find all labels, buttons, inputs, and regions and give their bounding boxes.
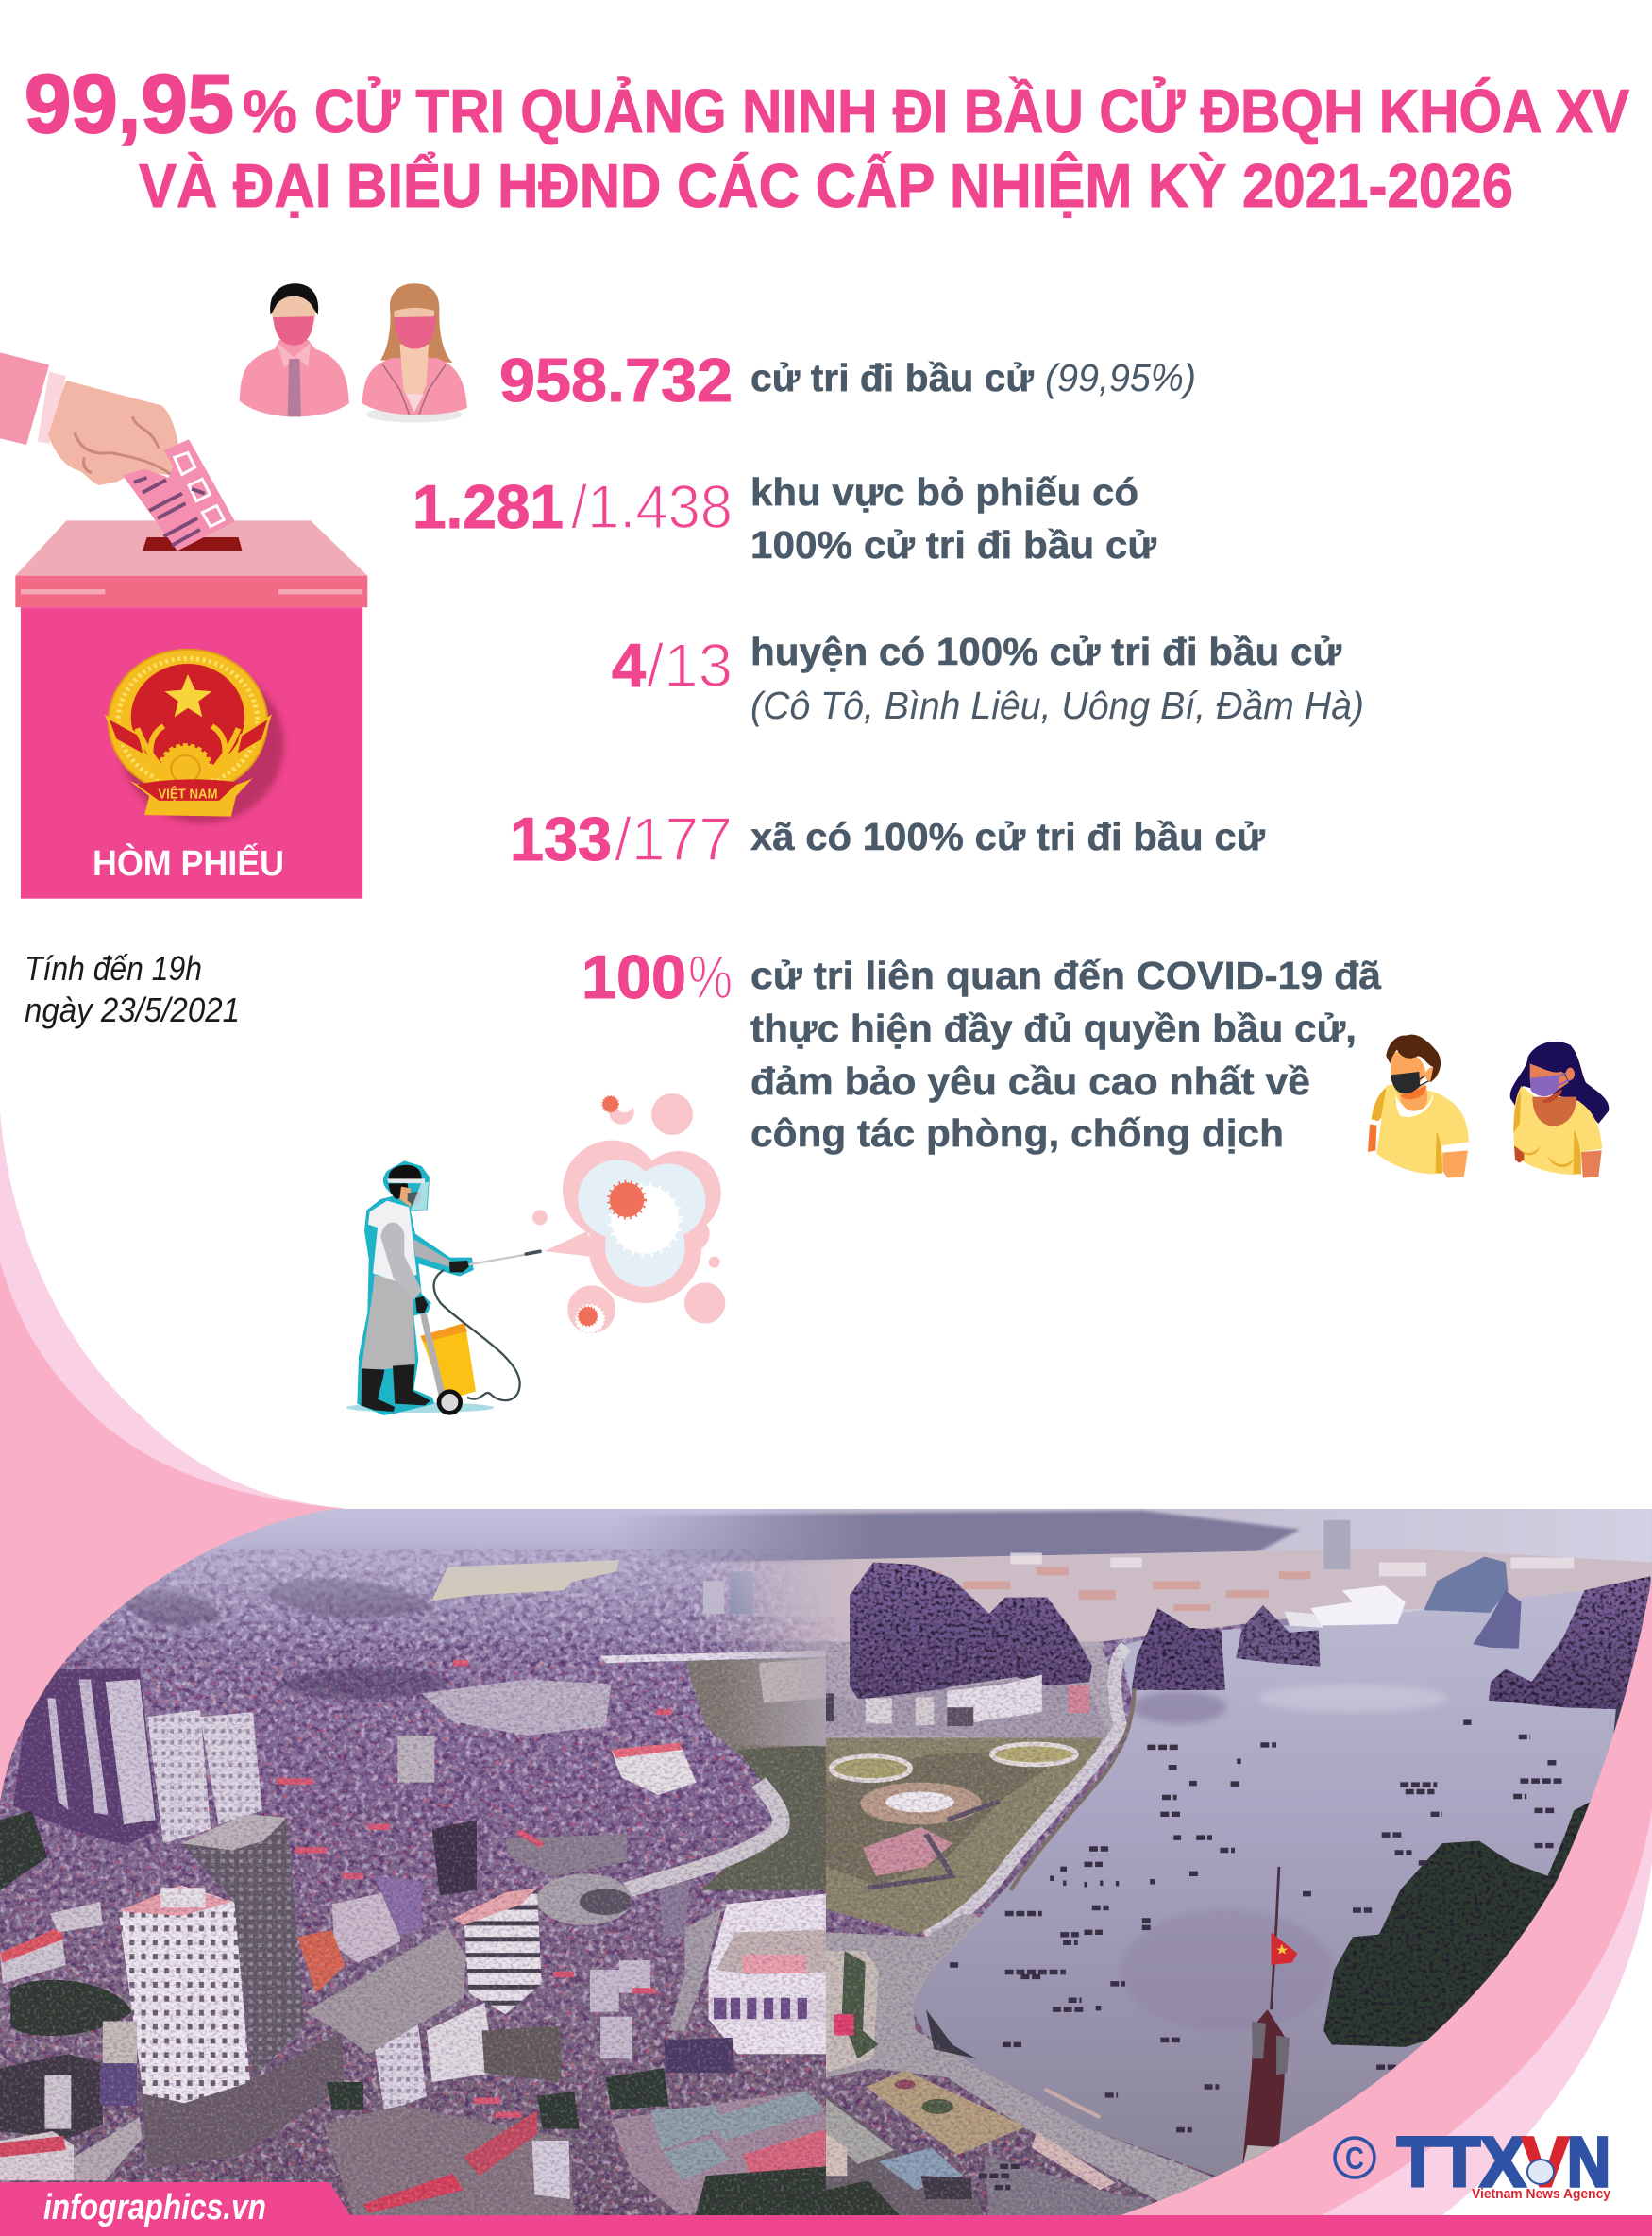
logo: TTXVN: V [1522,2123,1569,2201]
park and coastal road [826,1642,1226,2218]
logo: TTXVN [1335,2123,1611,2202]
stat row: 958.732 voters: cử tri đi bầu cử [750,356,1034,399]
photo: Ha Long city and bay [0,1509,1652,2236]
note: as of date: ngày 23/5/2021 [25,991,240,1029]
sleeve and cuff [0,352,66,445]
man [240,283,349,416]
stat row: 1.281/1.438 polling areas: 1.281 [413,472,564,541]
logo: TTXVN: N [1567,2123,1610,2201]
box lid top [15,520,367,576]
stat row: 133/177 communes: /177 [615,805,733,873]
note: as of date: Tính đến 19h [25,949,202,988]
stat row: 133/177 communes: xã có 100% cử tri đi bầu cử [750,815,1265,858]
stat row: 958.732 voters: (99,95%) [1045,356,1196,399]
icon: disinfection worker spraying virus [346,1093,725,1415]
fine detail overlay [0,1642,826,2215]
logo: TTXVN: TTX [1397,2123,1526,2201]
icon: man and woman wearing masks [1368,1035,1609,1177]
title: 99,95 [25,57,234,150]
box body [21,607,362,899]
hand [48,381,179,485]
left decorative swoosh [0,1111,343,2215]
yellow tank on wheel [420,1270,520,1413]
right decorative swoosh [1121,1576,1652,2215]
woman with purple mask [1510,1042,1609,1177]
stat row: 100% COVID-19 related voters: công tác phòng, chống dịch [750,1111,1284,1155]
big dark island bottom right [1323,1796,1600,2047]
icon: ballot box with hand [0,352,367,899]
national emblem: VIỆT NAM [158,786,218,802]
town below karst [826,1675,1108,1740]
icon: man and woman voters in masks [240,283,467,423]
note: as of date [25,949,240,1029]
stat row: 4/13 districts: 4 [612,631,646,700]
stat row: 4/13 districts: (Cô Tô, Bình Liêu, Uông Bí, Đầm Hà) [750,684,1364,727]
stat row: 4/13 districts: huyện có 100% cử tri đi bầu cử [750,630,1341,673]
national emblem [107,650,284,823]
land detail overlay [826,1642,1226,2218]
logo: TTXVN: C [1345,2141,1364,2176]
ballot paper [123,439,235,551]
stat row: 100% COVID-19 related voters: thực hiện đầy đủ quyền bầu cử, [750,1007,1357,1050]
footer tab: infographics.vn: infographics.vn [43,2188,266,2228]
man with black mask [1368,1035,1469,1177]
stat row: 133/177 communes: 133 [510,805,612,873]
stat row: 1.281/1.438 polling areas: khu vực bỏ phiếu có [750,470,1138,514]
worker figure [346,1160,494,1415]
stat row: 958.732 voters: 958.732 [499,346,733,415]
stat row: 1.281/1.438 polling areas: 100% cử tri đi bầu cử [750,523,1156,567]
stat row: 100% COVID-19 related voters: 100 [582,942,686,1011]
title: % [243,77,297,145]
stat row: 100% COVID-19 related voters: % [688,942,733,1011]
stat row: 1.281/1.438 polling areas [413,470,1156,567]
communication tower with flag [1242,1867,1297,2169]
logo: TTXVN: Vietnam News Agency [1472,2186,1611,2202]
photo right half: bay, karst islands, boats, tower [615,1509,1652,2236]
woman [362,283,467,423]
stat row: 100% COVID-19 related voters: cử tri liên quan đến COVID-19 đã [750,954,1381,997]
stat row: 100% COVID-19 related voters: đảm bảo yêu cầu cao nhất về [750,1059,1310,1103]
title: VÀ ĐẠI BIỂU HĐND CÁC CẤP NHIỆM KỲ 2021-2026 [139,151,1513,220]
box label: HÒM PHIẾU [93,843,284,883]
atmospheric haze, left city [89,1509,820,1641]
stat row: 4/13 districts [612,630,1364,727]
spray wand [469,1251,540,1264]
ballot slot [143,537,243,551]
spray cloud with viruses [532,1093,725,1333]
stat row: 100% COVID-19 related voters [582,942,1381,1155]
karst islands [850,1557,1652,1736]
title [25,57,1629,220]
stat row: 133/177 communes [510,805,1265,873]
box lid front [15,576,367,607]
bottom bar [0,2215,1652,2236]
boats [950,1722,1562,2188]
stat row: 4/13 districts: /13 [647,631,733,700]
photo left half: city towers [0,1560,826,2215]
footer tab: infographics.vn [0,2182,350,2236]
stat row: 1.281/1.438 polling areas: /1.438 [571,472,733,541]
stat row: 958.732 voters [499,346,1196,415]
